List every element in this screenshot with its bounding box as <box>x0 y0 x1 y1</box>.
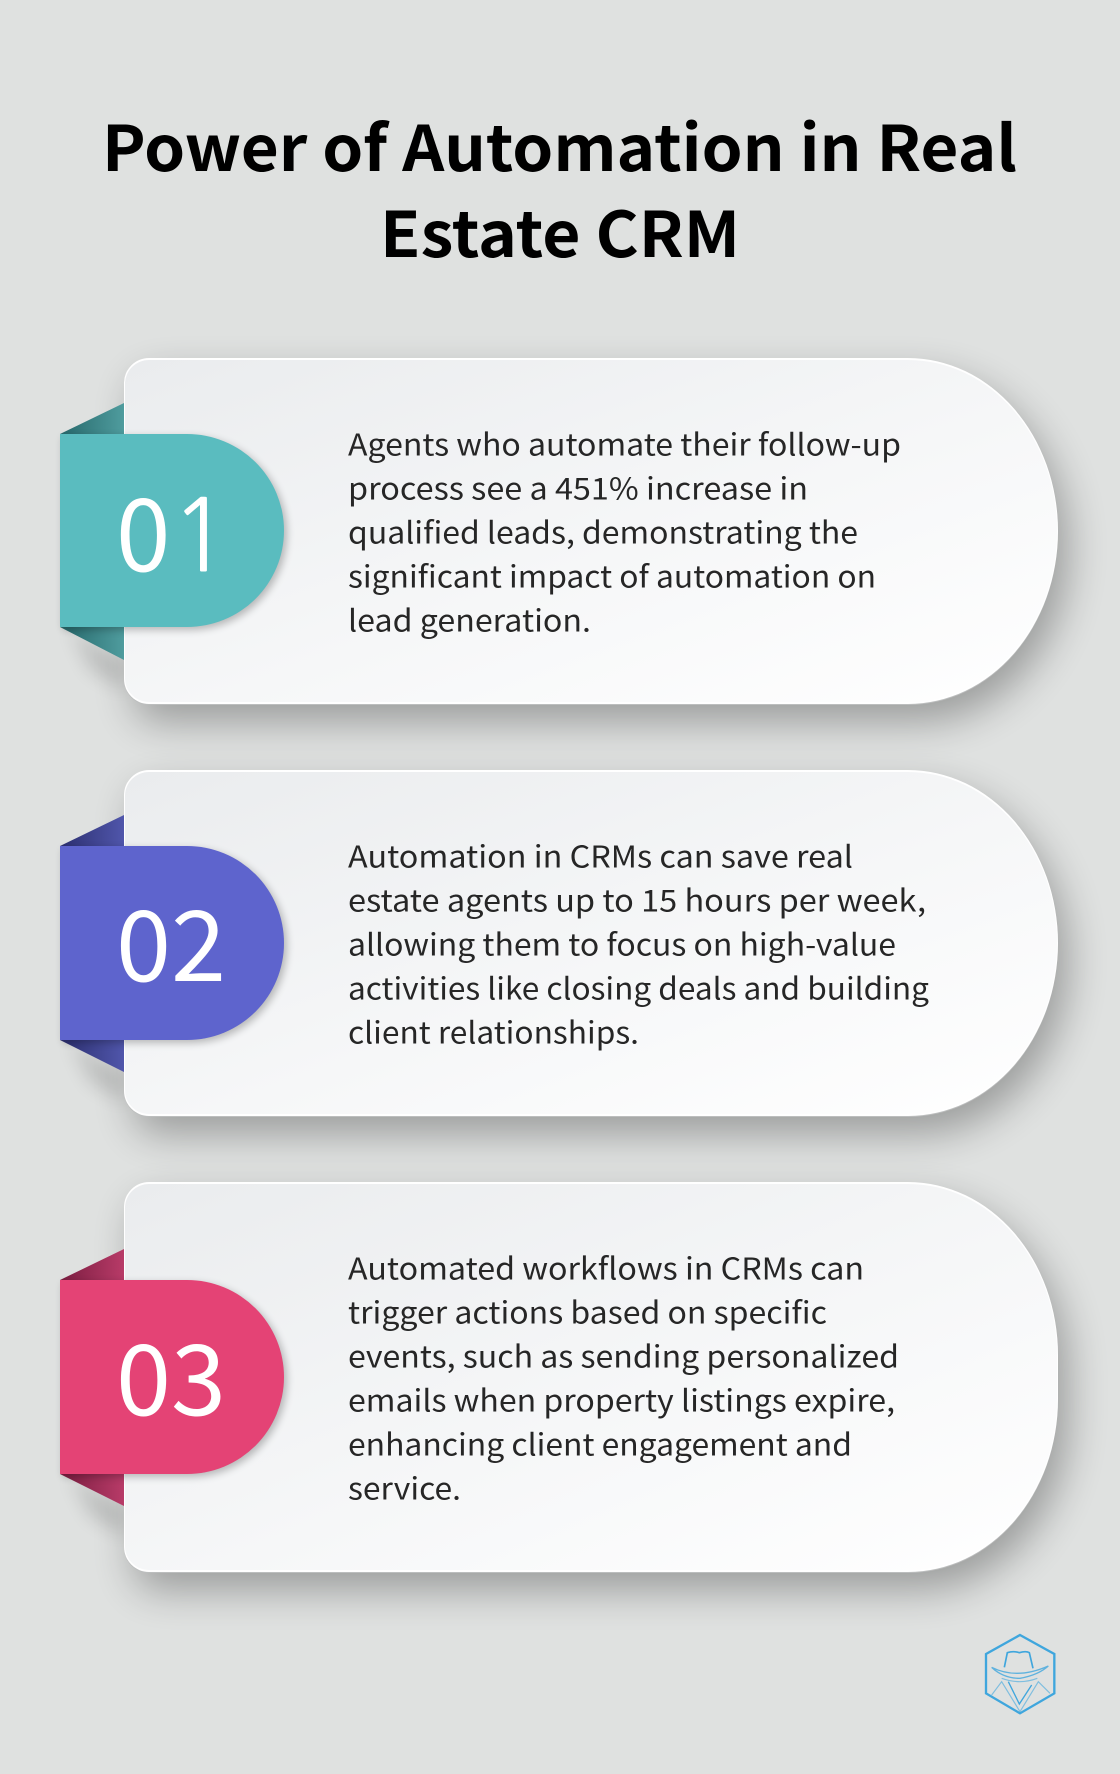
text block: step 1: Agents who automate their follow-up <box>348 421 901 465</box>
text block: step 1: qualified leads, demonstrating the <box>348 509 858 553</box>
ribbon fold top: step 1 <box>60 403 124 434</box>
text block: step 1: significant impact of automation on <box>348 553 876 597</box>
number badge: step 2 <box>60 846 284 1040</box>
text block: step 2: allowing them to focus on high-value <box>348 921 896 965</box>
number badge: step 1: 1 <box>170 486 231 586</box>
text block: step 3: emails when property listings expire, <box>348 1377 895 1421</box>
ribbon fold bottom: step 1 <box>60 627 124 660</box>
text block: step 1 <box>348 421 901 641</box>
ribbon fold top: step 3 <box>60 1249 124 1280</box>
text block: step 3: trigger actions based on specific <box>348 1289 827 1333</box>
title: Power of Automation in Real <box>102 99 1017 190</box>
text block: step 2: client relationships. <box>348 1009 639 1053</box>
text block: step 2: Automation in CRMs can save real <box>348 833 853 877</box>
title: Estate CRM <box>380 185 740 276</box>
text block: step 3 <box>348 1245 899 1509</box>
text block: step 2 <box>348 833 929 1053</box>
ribbon fold bottom: step 2 <box>60 1040 124 1072</box>
text block: step 3: events, such as sending personalized <box>348 1333 899 1377</box>
text block: step 3: enhancing client engagement and <box>348 1421 852 1465</box>
panel: step 2 card <box>60 770 1068 1134</box>
number badge: step 3: 03 <box>116 1302 226 1444</box>
text block: step 2: estate agents up to 15 hours per week, <box>348 877 926 921</box>
text block: step 1: process see a 451% increase in <box>348 465 808 509</box>
text block: step 3: Automated workflows in CRMs can <box>348 1245 864 1289</box>
text block: step 2: activities like closing deals and building <box>348 965 929 1009</box>
text block: step 1: lead generation. <box>348 597 591 641</box>
icon: spy hat logo <box>986 1635 1054 1713</box>
number badge: step 3 <box>60 1280 284 1474</box>
panel: step 3 card <box>60 1182 1068 1590</box>
ribbon fold bottom: step 3 <box>60 1474 124 1506</box>
title <box>102 99 1017 276</box>
panel: step 1 card <box>60 358 1068 722</box>
ribbon fold top: step 2 <box>60 815 124 846</box>
number badge: step 2: 02 <box>116 868 226 1010</box>
number badge: step 1: 0 <box>116 458 170 600</box>
number badge: step 1 <box>60 434 284 627</box>
text block: step 3: service. <box>348 1465 461 1509</box>
